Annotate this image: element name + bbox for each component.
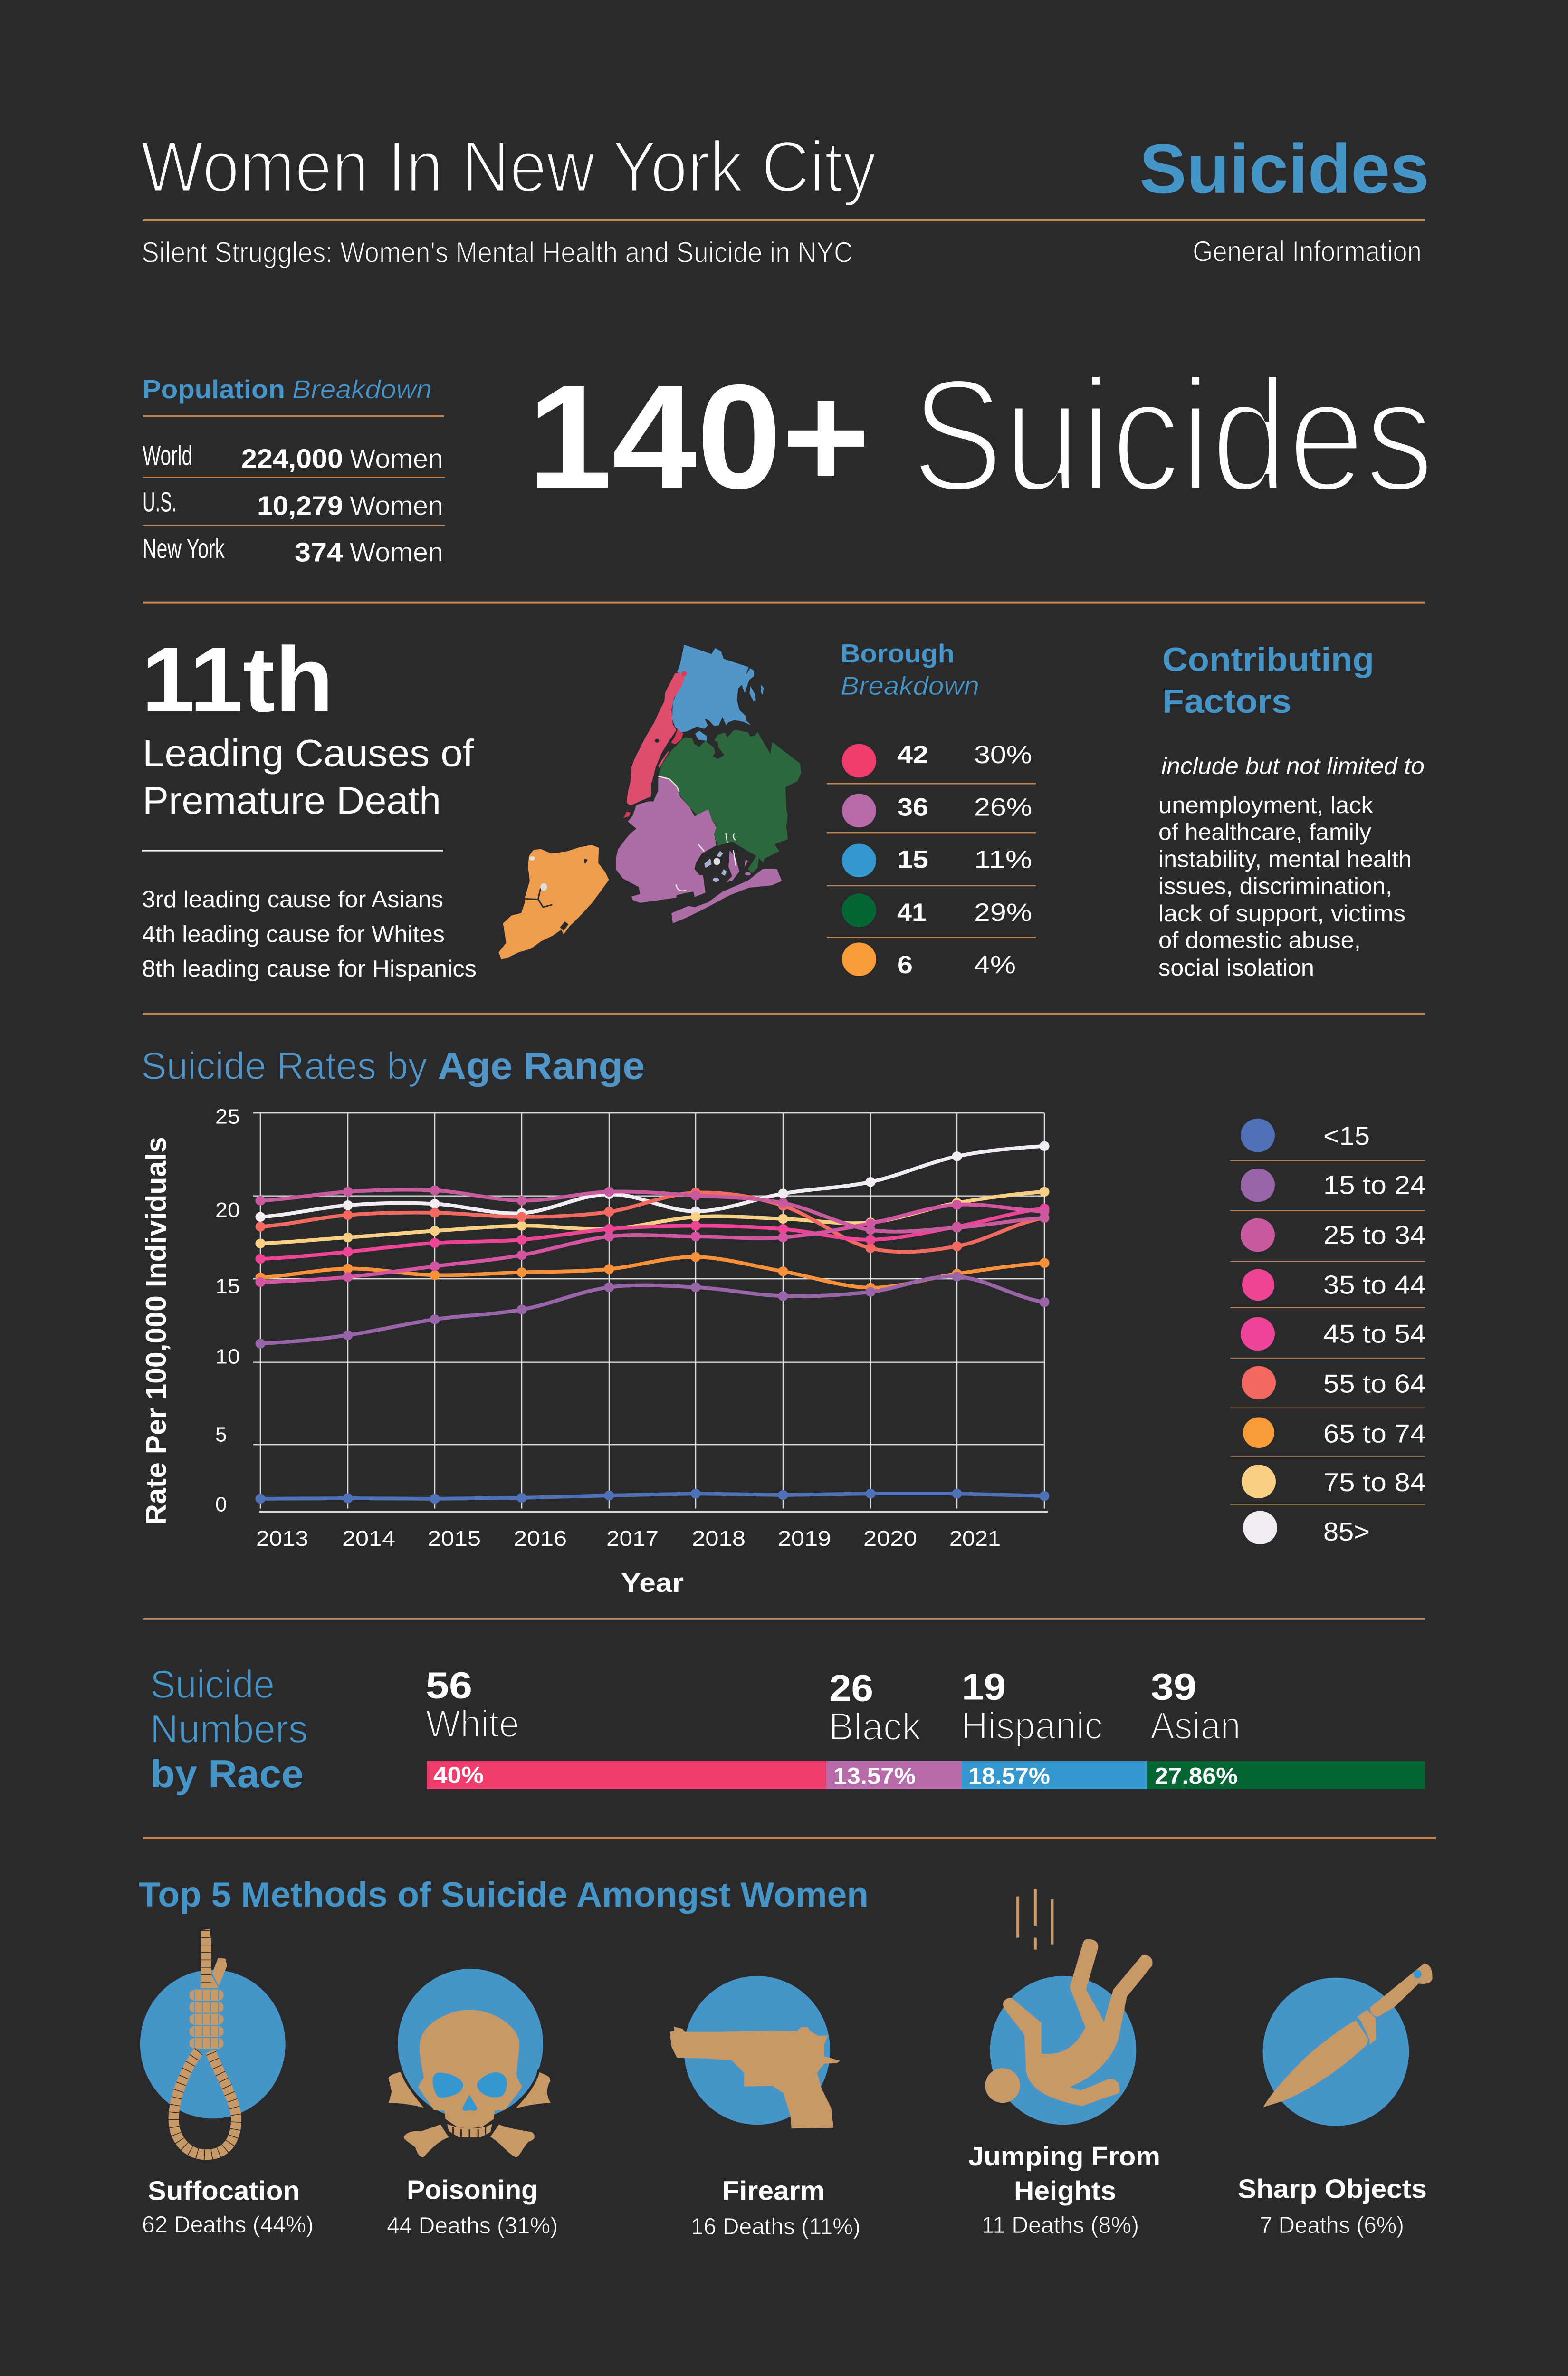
heading: Numbers (150, 1707, 308, 1751)
factor list: unemployment, lack (1158, 792, 1373, 818)
qualifier: include but not limited to (1161, 753, 1425, 779)
chart heading: Age Range (438, 1044, 645, 1087)
count: Hispanic: 19 (962, 1666, 1006, 1707)
legend item: 35 to 44: 35 to 44 (1323, 1270, 1426, 1299)
heading: Borough (841, 639, 955, 668)
deaths: 62 Deaths (44%) (142, 2212, 314, 2238)
legend item: 55 to 64: 55 to 64 (1323, 1369, 1426, 1398)
count: Asian: 39 (1151, 1666, 1196, 1707)
icon: handgun (670, 1976, 840, 2128)
panel: population breakdown (143, 375, 445, 567)
row: Manhattan 42: 42 (897, 741, 928, 769)
panel: suicide numbers by race (150, 1662, 1425, 1796)
count: Hispanic (961, 1666, 1103, 1747)
panel: eleventh leading cause: Premature Death (143, 779, 441, 822)
icon: noose (140, 1929, 286, 2155)
big statistic: 140+ (527, 354, 870, 519)
map: New York City boroughs (498, 645, 801, 959)
line chart: suicide rates by age range (140, 1106, 1048, 1598)
factor list: instability, mental health (1158, 846, 1412, 872)
panel: borough breakdown: Breakdown (841, 671, 979, 700)
series: 35 to 44 (260, 1205, 1044, 1282)
method: sharp objects (1238, 1964, 1433, 2238)
count: Black (829, 1667, 921, 1748)
icon: falling figure (985, 1889, 1153, 2125)
label: Suffocation (148, 2176, 300, 2206)
chart heading: Suicide Rates by (141, 1044, 427, 1087)
factor list: social isolation (1158, 955, 1314, 981)
caption: Leading Causes of (143, 732, 474, 775)
legend item: 45 to 54 (1241, 1317, 1426, 1351)
method: jumping from heights: Heights (1014, 2176, 1116, 2206)
panel: population breakdown: 374 (295, 537, 343, 567)
big statistic (527, 345, 1434, 525)
panel: eleventh leading cause: 8th leading cause for Hispanics (142, 956, 477, 982)
row: Staten Island 6: 4% (974, 951, 1016, 979)
series: 65 to 74 (260, 1257, 1044, 1288)
count: Black: 26 (829, 1667, 873, 1709)
x axis labels: 2015 (428, 1526, 481, 1551)
heading (150, 1662, 308, 1796)
row: Staten Island 6: 6 (897, 951, 913, 979)
panel: eleventh leading cause (142, 628, 477, 982)
x axis labels: 2013 (256, 1526, 308, 1551)
x axis labels: 2020 (863, 1526, 917, 1551)
section label: General Information (1193, 236, 1422, 268)
stacked bar: 13.57% (833, 1763, 916, 1789)
row: Bronx 15 (842, 843, 1032, 877)
legend item: 85 and over: 85> (1323, 1517, 1370, 1546)
row: Brooklyn 36: 26% (974, 794, 1032, 822)
y axis labels: 25 (215, 1106, 240, 1129)
big rank: 11th (142, 628, 334, 731)
heading: Contributing (1162, 641, 1374, 679)
label: Firearm (722, 2176, 825, 2206)
panel: contributing factors: Factors (1162, 683, 1291, 720)
stacked bar: 40% (433, 1762, 484, 1788)
y axis title: Rate Per 100,000 Individuals (140, 1137, 172, 1525)
panel: population breakdown: Women (350, 537, 443, 567)
icon: knife (1263, 1964, 1433, 2126)
legend item: 75 to 84: 75 to 84 (1323, 1468, 1426, 1497)
series: under 15 (260, 1494, 1044, 1499)
legend item: under 15: <15 (1323, 1121, 1370, 1150)
row: Manhattan 42: 30% (974, 741, 1032, 769)
method: suffocation (140, 1929, 314, 2238)
heading: Suicide (150, 1662, 275, 1706)
race rankings: 3rd leading cause for Asians (142, 886, 443, 912)
x axis title: Year (621, 1568, 684, 1598)
factor list: lack of support, victims (1158, 901, 1405, 927)
legend item: 35 to 44 (1242, 1269, 1426, 1301)
method: poisoning (387, 1969, 558, 2239)
map details (525, 776, 736, 931)
y axis labels: 20 (215, 1199, 240, 1222)
stacked bar: 27.86% (1155, 1763, 1238, 1789)
label: Poisoning (407, 2175, 538, 2205)
y axis labels: 10 (215, 1346, 240, 1369)
series: 45 to 54 (260, 1208, 1044, 1259)
methods heading: Top 5 Methods of Suicide Amongst Women (139, 1875, 869, 1914)
count: White: White (426, 1703, 519, 1745)
method: firearm (670, 1976, 860, 2240)
count: Black: Black (829, 1705, 921, 1748)
panel: eleventh leading cause: 4th leading cause for Whites (142, 921, 445, 947)
legend item: 15 to 24 (1241, 1169, 1426, 1202)
row: Brooklyn 36: 36 (897, 794, 928, 822)
y axis labels: 15 (215, 1275, 240, 1298)
factor list: of healthcare, family (1158, 819, 1371, 845)
legend item: 15 to 24: 15 to 24 (1323, 1170, 1426, 1200)
subtitle: Silent Struggles: Women's Mental Health and Suicide in NYC (142, 237, 853, 269)
method: jumping from heights (968, 1889, 1160, 2238)
stacked bar: 18.57% (968, 1763, 1050, 1789)
legend item: 45 to 54: 45 to 54 (1323, 1319, 1426, 1348)
label: Sharp Objects (1238, 2174, 1427, 2204)
count: Asian: Asian (1150, 1705, 1241, 1747)
series: 15 to 24 (260, 1276, 1044, 1343)
borough: Staten Island (498, 845, 609, 959)
count: Hispanic: Hispanic (961, 1705, 1103, 1747)
deaths: 16 Deaths (11%) (691, 2213, 860, 2240)
x axis labels: 2017 (606, 1526, 659, 1551)
borough: Bronx (672, 645, 764, 741)
series: 85 and over (260, 1146, 1044, 1217)
count: White: 56 (426, 1664, 472, 1706)
row: Queens 41: 41 (897, 899, 927, 927)
borough: Brooklyn (616, 776, 782, 923)
panel: population breakdown: Women (350, 444, 443, 474)
count: White (426, 1664, 519, 1745)
legend item: 55 to 64 (1242, 1366, 1426, 1399)
chart heading (141, 1044, 645, 1087)
panel: population breakdown: 10,279 (257, 491, 343, 521)
x axis labels: 2018 (692, 1526, 746, 1551)
borough: Queens (658, 729, 801, 873)
row: Staten Island 6 (842, 942, 1016, 979)
title: Women In New York City (141, 126, 876, 207)
factor list: of domestic abuse, (1158, 928, 1361, 953)
deaths: 44 Deaths (31%) (387, 2213, 558, 2239)
row: Bronx 15: 11% (974, 846, 1032, 873)
panel: population breakdown: 224,000 (241, 444, 343, 474)
borough: Manhattan (623, 671, 687, 818)
legend item: 65 to 74: 65 to 74 (1323, 1419, 1426, 1448)
panel: borough breakdown (827, 639, 1036, 979)
series: 55 to 64 (260, 1193, 1044, 1252)
heading: Population (143, 375, 285, 404)
stacked bar (427, 1761, 1425, 1789)
legend item: 65 to 74 (1243, 1417, 1426, 1448)
panel: population breakdown: Breakdown (292, 375, 432, 404)
y axis labels: 0 (215, 1494, 227, 1516)
factor list (1158, 792, 1412, 981)
row: Queens 41 (842, 893, 1032, 927)
deaths: 7 Deaths (6%) (1260, 2212, 1404, 2238)
series: 75 to 84 (260, 1192, 1044, 1244)
row: Brooklyn 36 (842, 794, 1032, 827)
legend item: under 15 (1241, 1119, 1370, 1152)
legend item: 25 to 34 (1241, 1218, 1426, 1252)
series: 25 to 34 (260, 1189, 1044, 1232)
legend item: 75 to 84 (1242, 1465, 1426, 1498)
legend item: 25 to 34: 25 to 34 (1323, 1220, 1426, 1250)
x axis labels: 2021 (949, 1526, 1001, 1551)
panel: population breakdown: Women (350, 491, 443, 521)
icon: skull and crossbones (387, 1969, 553, 2157)
x axis labels (256, 1526, 1001, 1551)
row: Manhattan 42 (842, 741, 1032, 777)
y axis labels: 5 (215, 1424, 227, 1446)
row: New York: New York (143, 533, 225, 564)
row: Bronx 15: 15 (897, 846, 928, 873)
chart legend (1230, 1119, 1426, 1546)
big statistic: Suicides (911, 345, 1434, 525)
deaths: 11 Deaths (8%) (982, 2212, 1139, 2238)
row: U.S.: U.S. (143, 486, 177, 517)
topic heading: Suicides (1139, 130, 1429, 208)
panel: contributing factors (1158, 641, 1425, 981)
x axis labels: 2014 (342, 1526, 395, 1551)
x axis labels: 2019 (778, 1526, 831, 1551)
label: Jumping From (968, 2141, 1160, 2172)
header (141, 126, 1429, 269)
row: world: World (143, 440, 192, 471)
row: Queens 41: 29% (974, 899, 1032, 927)
legend item: 85 and over (1243, 1511, 1370, 1546)
count: Asian (1150, 1666, 1241, 1747)
factor list: issues, discrimination, (1158, 873, 1392, 899)
y axis labels (215, 1106, 240, 1516)
x axis labels: 2016 (514, 1526, 567, 1551)
heading: by Race (151, 1752, 304, 1796)
